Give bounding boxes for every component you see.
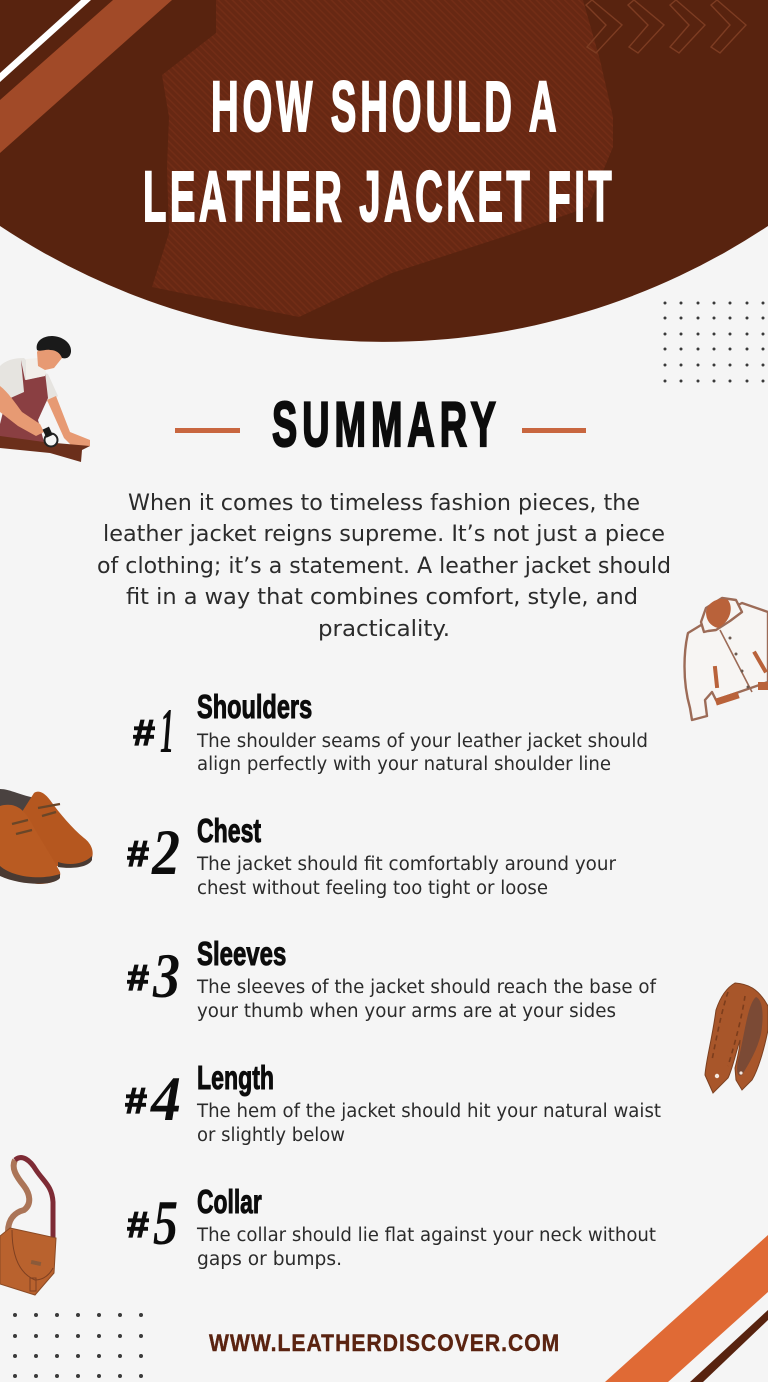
intro paragraph: When it comes to timeless fashion pieces, the [128,490,640,516]
heading: Sleeves [197,936,286,973]
number 1 [133,696,174,766]
title: LEATHER JACKET FIT [143,158,612,237]
number 3: # [127,957,149,998]
description: gaps or bumps. [197,1249,342,1270]
description [196,854,616,899]
number 5 [127,1188,178,1258]
number 3: 3 [152,941,180,1011]
description: The collar should lie flat against your neck without [196,1225,656,1246]
description: The hem of the jacket should hit your natural waist [196,1101,661,1122]
list item 5: collar [127,1184,656,1270]
description [196,1101,661,1146]
number 5: # [127,1204,149,1245]
list item 3: sleeves [127,936,656,1022]
description: The jacket should fit comfortably around your [196,854,616,875]
intro paragraph [97,490,671,642]
icon: leather strap [705,983,768,1093]
dark diagonal line: bottom right [690,1310,768,1382]
number 3 [127,941,180,1011]
number 5: 5 [153,1188,178,1258]
description: The sleeves of the jacket should reach the base of [196,977,656,998]
heading: Collar [197,1184,262,1221]
list item 2: chest [127,813,616,899]
white diagonal line [0,0,91,82]
right dash [522,428,586,433]
left dash [175,428,240,433]
intro paragraph: leather jacket reigns supreme. It’s not just a piece [103,521,665,547]
list item 1: shoulders [133,689,648,775]
description: The shoulder seams of your leather jacket should [196,731,648,752]
number 2 [127,817,180,889]
intro paragraph: fit in a way that combines comfort, style, and [126,584,638,610]
intro paragraph: practicality. [318,616,450,642]
chevrons [586,0,746,53]
icon: leather bag [0,1158,56,1295]
dot grid: top right [664,302,764,382]
leather texture patch [152,0,613,317]
description [196,977,656,1022]
orange diagonal stripe: bottom right [605,1235,768,1382]
description [196,1225,656,1270]
number 2: 2 [151,817,180,889]
icon: jacket [684,598,768,720]
intro paragraph: of clothing; it’s a statement. A leather jacket should [97,553,671,579]
number 1: # [133,712,155,753]
title: HOW SHOULD A [211,68,557,147]
list item 1: shoulders: 1 [160,696,174,766]
orange diagonal stripe [0,0,172,153]
dot grid: bottom left [13,1313,143,1378]
heading: Chest [197,813,261,850]
header panel [0,0,768,342]
heading: Shoulders [197,689,312,726]
description: your thumb when your arms are at your sides [197,1001,616,1022]
title [143,68,612,237]
heading: summary [175,390,586,461]
description: chest without feeling too tight or loose [197,878,548,899]
number 4: # [125,1080,147,1121]
description: align perfectly with your natural shoulder line [197,754,611,775]
number 4: 4 [150,1064,181,1134]
icon: leather craftsman [0,336,90,462]
icon: shoes [0,789,93,884]
website footer: WWW.LEATHERDISCOVER.COM [209,1330,559,1356]
number 2: # [127,833,149,874]
summary text: SUMMARY [272,390,496,461]
description: or slightly below [197,1125,345,1146]
description [196,731,648,775]
number 4 [125,1064,181,1134]
heading: Length [197,1060,274,1097]
list item 4: length [125,1060,661,1146]
